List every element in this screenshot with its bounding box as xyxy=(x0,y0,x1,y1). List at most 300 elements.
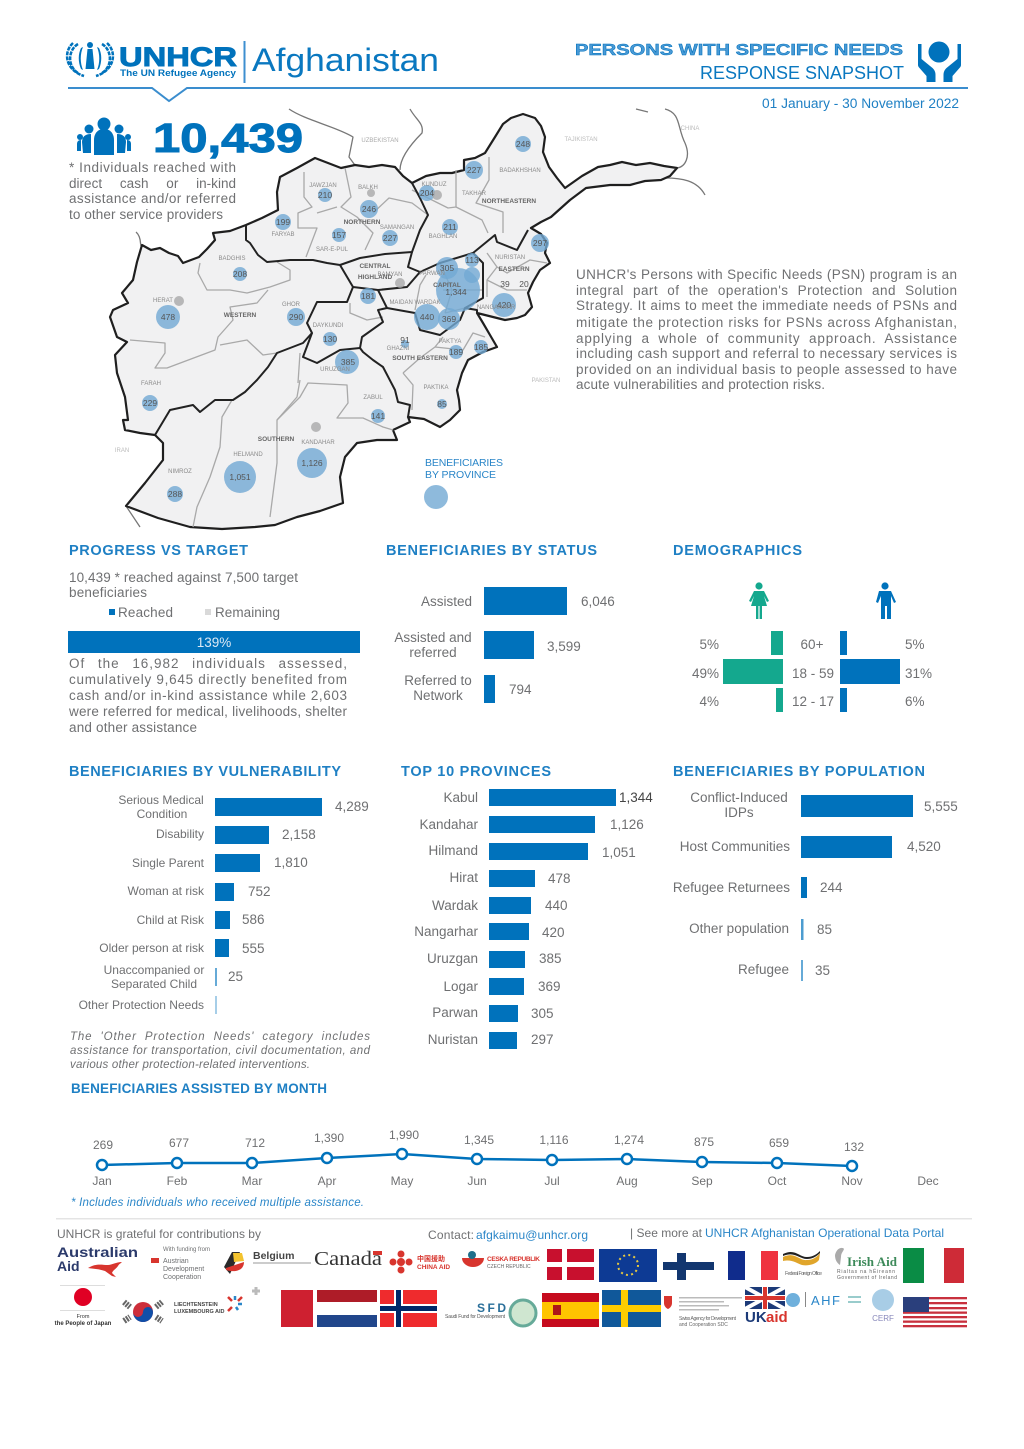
heading: BENEFICIARIES ASSISTED BY MONTH xyxy=(71,1081,327,1096)
legend: Reached xyxy=(118,605,173,620)
panel: beneficiaries by status xyxy=(386,543,615,703)
line chart: 132 xyxy=(844,1140,864,1154)
province values: 297 xyxy=(533,238,547,248)
bar chart: Single Parent xyxy=(132,856,205,870)
population pyramid: 6% xyxy=(905,694,925,709)
province and region labels: BALKH xyxy=(358,185,378,191)
province and region labels: TAKHAR xyxy=(462,191,487,197)
province and region labels: KANDAHAR xyxy=(301,440,335,446)
bar chart: 2,158 xyxy=(282,827,316,842)
flag: Finland xyxy=(663,1253,714,1280)
province values: 420 xyxy=(497,300,511,310)
target text: beneficiaries xyxy=(69,585,147,600)
big number: 10,439 xyxy=(153,115,303,161)
donor: Czech aid xyxy=(462,1251,540,1270)
progress note: Of the 16,982 individuals assessed, xyxy=(69,656,347,671)
country labels: PAKISTAN xyxy=(532,378,560,384)
line chart: Oct xyxy=(768,1174,787,1188)
bar chart: 586 xyxy=(242,912,265,927)
province values: 185 xyxy=(474,342,488,352)
donor: Canada: Canada xyxy=(314,1248,382,1270)
bar chart xyxy=(673,790,958,981)
line chart: Apr xyxy=(318,1174,336,1188)
bar chart: 85 xyxy=(817,922,832,937)
donor: AHF: AHF xyxy=(811,1293,842,1308)
population pyramid xyxy=(692,631,932,712)
logo wordmark: The UN Refugee Agency xyxy=(120,68,236,78)
progress note xyxy=(68,656,348,735)
donor: Saudi Fund for Development: SFD xyxy=(477,1301,506,1315)
province values: 39 xyxy=(500,279,510,289)
province and region labels: KUNDUZ xyxy=(422,182,447,188)
bar chart: 4,289 xyxy=(335,799,369,814)
donor: Austrian Development Cooperation: With funding from xyxy=(163,1247,210,1253)
panel: progress vs target xyxy=(68,543,360,735)
province and region labels: BAGHLAN xyxy=(429,234,457,240)
bar chart: Nangarhar xyxy=(414,924,478,939)
province and region labels: SAR-E-PUL xyxy=(316,247,349,253)
donor: Japan: the People of Japan xyxy=(55,1321,112,1327)
programme description: integral part of the operation's Protection and Solution xyxy=(576,283,957,298)
province and region labels: CAPITAL xyxy=(433,282,461,289)
donor: Czech aid: CZECH REPUBLIC xyxy=(487,1264,531,1270)
line chart: 659 xyxy=(769,1136,789,1150)
province and region labels: WESTERN xyxy=(224,312,257,319)
bar chart: referred xyxy=(409,645,457,660)
donor: Switzerland: Swiss Agency for Development xyxy=(679,1316,737,1322)
bar chart: 25 xyxy=(228,969,243,984)
donor: CERF: CERF xyxy=(872,1314,894,1323)
icon: male xyxy=(876,582,896,619)
province and region labels: EASTERN xyxy=(498,266,530,273)
icon: UNHCR emblem xyxy=(67,42,113,76)
logo wordmark: UNHCR xyxy=(119,42,237,72)
bar chart: Referred to xyxy=(404,673,472,688)
country labels: CHINA xyxy=(681,126,699,132)
map legend xyxy=(424,457,503,509)
line chart xyxy=(92,1128,939,1188)
province and region labels: MAIDAN WARDAK xyxy=(389,300,441,306)
province and region labels: PAKTIKA xyxy=(424,385,448,391)
heading: DEMOGRAPHICS xyxy=(673,543,802,559)
province and region labels: FARAH xyxy=(141,381,161,387)
heading: PROGRESS VS TARGET xyxy=(69,543,248,559)
bar chart: 1,126 xyxy=(610,817,644,832)
donor: Germany: Federal Foreign Office xyxy=(785,1271,822,1277)
bar chart: Logar xyxy=(443,979,479,994)
icon: hands protecting person xyxy=(918,42,961,82)
province and region labels: JAWZJAN xyxy=(309,183,337,189)
donor: Switzerland: and Cooperation SDC xyxy=(679,1322,728,1328)
bar chart: Nuristan xyxy=(428,1032,478,1047)
donor: UK aid: aid xyxy=(766,1309,788,1326)
legend: Remaining xyxy=(215,605,280,620)
province values: 204 xyxy=(420,188,434,198)
bar chart: 385 xyxy=(539,951,562,966)
progress note: and other assistance xyxy=(69,720,197,735)
bar chart: Assisted xyxy=(421,594,472,609)
line chart: Jun xyxy=(467,1174,487,1188)
line chart: 1,990 xyxy=(389,1128,419,1142)
province values: 246 xyxy=(362,204,376,214)
contact: afgkaimu@unhcr.org xyxy=(476,1228,588,1242)
donor: Switzerland xyxy=(664,1296,742,1328)
bar chart: 440 xyxy=(545,898,568,913)
italic note: The 'Other Protection Needs' category includes xyxy=(70,1031,370,1043)
heading: BENEFICIARIES BY VULNERABILITY xyxy=(69,764,341,780)
logo wordmark xyxy=(119,42,237,78)
province values: 157 xyxy=(332,230,346,240)
population pyramid: 49% xyxy=(692,666,719,681)
donor: Saudi Fund for Development: Saudi Fund for Development xyxy=(445,1314,506,1320)
bar chart: Hirat xyxy=(449,870,478,885)
bar chart: Older person at risk xyxy=(99,941,205,955)
flag: Republic of Korea xyxy=(124,1302,162,1322)
bar chart: 305 xyxy=(531,1006,554,1021)
line chart: Aug xyxy=(616,1174,638,1188)
donor: Austrian Development Cooperation: Development xyxy=(163,1266,204,1273)
legend xyxy=(109,605,280,620)
individuals note: * Individuals reached with xyxy=(69,160,236,175)
population pyramid: 18 - 59 xyxy=(792,666,834,681)
line chart: Jan xyxy=(92,1174,112,1188)
bar chart: 35 xyxy=(815,963,830,978)
province and region labels xyxy=(141,168,541,475)
population pyramid: 4% xyxy=(699,694,719,709)
province and region labels: HERAT xyxy=(153,298,173,304)
province and region labels: GHOR xyxy=(282,302,301,308)
flag: Netherlands xyxy=(317,1290,377,1327)
bar chart: Unaccompanied or xyxy=(104,963,204,977)
donor: China Aid xyxy=(390,1250,450,1274)
province values: 229 xyxy=(143,398,157,408)
bar chart: 478 xyxy=(548,871,571,886)
bar chart: Kandahar xyxy=(419,817,478,832)
programme description: including cash support and referral to necessary services is xyxy=(576,346,957,361)
province values: 290 xyxy=(289,312,303,322)
black regional boundaries xyxy=(155,183,528,435)
province and region labels: SAMANGAN xyxy=(380,225,414,231)
province values: 85 xyxy=(437,399,447,409)
donor: China Aid: CHINA AID xyxy=(417,1264,450,1271)
donor: Irish Aid xyxy=(835,1248,898,1281)
bar chart: 6,046 xyxy=(581,594,615,609)
bar chart: 244 xyxy=(820,880,843,895)
line chart: 1,116 xyxy=(539,1133,569,1147)
population pyramid: 31% xyxy=(905,666,932,681)
bar chart: Condition xyxy=(137,807,187,821)
province and region labels: HELMAND xyxy=(233,452,263,458)
flag: Spain xyxy=(542,1293,599,1327)
flag: Monaco xyxy=(281,1290,313,1327)
province values: 385 xyxy=(341,357,355,367)
italic note: assistance for transportation, civil documentation, and xyxy=(70,1045,371,1057)
flag: Italy xyxy=(903,1248,964,1283)
bar chart: 555 xyxy=(242,941,265,956)
bar chart: Wardak xyxy=(432,898,478,913)
flag: France xyxy=(728,1251,778,1280)
bar chart: 1,051 xyxy=(602,845,636,860)
italic note: various other protection-related interventions. xyxy=(70,1059,310,1071)
bar chart: Refugee Returnees xyxy=(673,880,790,895)
heading: BENEFICIARIES BY POPULATION xyxy=(673,764,925,780)
donor: Liechtenstein and Luxembourg xyxy=(174,1287,260,1315)
heading: TOP 10 PROVINCES xyxy=(401,764,551,780)
province values: 248 xyxy=(516,139,530,149)
line chart: Dec xyxy=(917,1174,939,1188)
bar chart: Disability xyxy=(156,827,204,841)
data portal link: UNHCR Afghanistan Operational Data Portal xyxy=(705,1226,944,1240)
donor: Czech aid: CESKA REPUBLIK xyxy=(487,1256,540,1263)
donor: Austrian Development Cooperation: Cooperation xyxy=(163,1274,201,1281)
bar chart: 794 xyxy=(509,682,532,697)
bar chart: 5,555 xyxy=(924,799,958,814)
population pyramid: 60+ xyxy=(801,637,824,652)
province and region labels: CENTRAL xyxy=(359,263,391,270)
line chart: May xyxy=(391,1174,413,1188)
donor: Irish Aid: Rialtas na hÉireann xyxy=(837,1268,895,1275)
country labels: TAJIKISTAN xyxy=(564,137,598,143)
individuals note: assistance and/or referred xyxy=(69,191,236,206)
headline figure xyxy=(69,115,303,222)
donor: AHF xyxy=(786,1292,861,1308)
donor: Belgium: Belgium xyxy=(253,1250,294,1262)
donor: Liechtenstein and Luxembourg: LUXEMBOURG AID xyxy=(174,1309,225,1315)
province values: 1,051 xyxy=(229,472,251,482)
line chart: 1,390 xyxy=(314,1131,344,1145)
bar chart: Child at Risk xyxy=(137,913,205,927)
bar chart: Hilmand xyxy=(428,843,478,858)
bar chart: 3,599 xyxy=(547,639,581,654)
bar chart: Network xyxy=(413,688,463,703)
line chart: 1,274 xyxy=(614,1133,644,1147)
donor: Australian Aid xyxy=(57,1244,138,1277)
province and region labels: NORTHEASTERN xyxy=(482,198,536,205)
donor: Japan: From xyxy=(77,1314,90,1320)
province values: 305 xyxy=(440,263,454,273)
bar chart: Woman at risk xyxy=(128,884,205,898)
line chart: 1,345 xyxy=(464,1133,494,1147)
bar chart xyxy=(79,793,369,1014)
donor: Belgium xyxy=(224,1250,311,1274)
province and region labels: URUZGAN xyxy=(320,367,350,373)
panel: beneficiaries by population xyxy=(673,764,958,981)
bar chart: 369 xyxy=(538,979,561,994)
country labels: UZBEKISTAN xyxy=(361,138,399,144)
line chart: Nov xyxy=(841,1174,863,1188)
donor: Austrian Development Cooperation xyxy=(151,1247,210,1281)
donor: Japan xyxy=(55,1285,112,1327)
bar chart: Uruzgan xyxy=(427,951,478,966)
panel: beneficiaries by vulnerability xyxy=(69,764,371,1071)
province values: 478 xyxy=(161,312,175,322)
programme description: provided on an individual basis to people assessed to have xyxy=(576,362,957,377)
bar chart: Other Protection Needs xyxy=(79,998,204,1012)
province values: 141 xyxy=(371,411,385,421)
population pyramid: 5% xyxy=(905,637,925,652)
province and region labels: PARWAN xyxy=(419,271,445,277)
province values: 113 xyxy=(465,255,479,265)
province and region labels: FARYAB xyxy=(271,232,295,238)
province and region labels: ZABUL xyxy=(363,395,383,401)
line chart: 677 xyxy=(169,1136,189,1150)
province values: 91 xyxy=(400,335,410,345)
icon: group of people xyxy=(77,118,131,155)
province and region labels: HIGHLAND xyxy=(358,274,392,281)
progress bar: 139% xyxy=(197,635,231,650)
heading: BENEFICIARIES BY STATUS xyxy=(386,543,597,559)
footnote: * Includes individuals who received multiple assistance. xyxy=(71,1197,364,1209)
donor: Irish Aid: Government of Ireland xyxy=(837,1275,897,1281)
line chart: Mar xyxy=(242,1174,262,1188)
progress note: were referred for medical, livelihoods, shelter xyxy=(68,704,348,719)
donor: CERF xyxy=(872,1289,894,1323)
provinces and country fill xyxy=(110,114,677,529)
individuals note: direct cash or in-kind xyxy=(69,176,236,191)
bar chart: Assisted and xyxy=(394,630,472,645)
province values: 227 xyxy=(383,233,397,243)
province values: 211 xyxy=(443,222,457,232)
donor: Germany xyxy=(783,1251,822,1277)
province values: 130 xyxy=(323,334,337,344)
bar chart: 4,520 xyxy=(907,839,941,854)
footer xyxy=(55,1218,972,1328)
bar chart: IDPs xyxy=(724,805,754,820)
contact: Contact: xyxy=(428,1228,474,1242)
line chart: 712 xyxy=(245,1136,265,1150)
programme description: UNHCR's Persons with Specific Needs (PSN) program is an xyxy=(576,267,957,282)
province and region labels: PAKTYA xyxy=(439,339,461,345)
province and region labels: SOUTH EASTERN xyxy=(392,355,448,362)
province values: 208 xyxy=(233,269,247,279)
country labels xyxy=(115,126,699,454)
bar chart: 1,810 xyxy=(274,855,308,870)
programme description: acute vulnerabilities and protection risks. xyxy=(576,377,825,392)
line chart: 875 xyxy=(694,1135,714,1149)
province values xyxy=(143,139,547,499)
province values: 227 xyxy=(467,165,481,175)
thanks line: UNHCR is grateful for contributions by xyxy=(57,1227,261,1241)
bar chart: 752 xyxy=(248,884,271,899)
panel: demographics xyxy=(673,543,932,712)
province values: 189 xyxy=(449,347,463,357)
province and region labels: BADAKHSHAN xyxy=(499,168,541,174)
bar chart: Other population xyxy=(689,921,789,936)
bar chart xyxy=(394,587,615,703)
flag: European Union xyxy=(599,1249,657,1282)
donor: Austrian Development Cooperation: Austrian xyxy=(163,1258,189,1265)
bar chart: Host Communities xyxy=(680,839,790,854)
line chart: Sep xyxy=(691,1174,713,1188)
donor: Saudi Fund for Development xyxy=(445,1300,536,1326)
title: Afghanistan: Afghanistan xyxy=(252,42,439,78)
programme description: applying a whole of community approach. Assistance xyxy=(576,331,957,346)
title: persons with specific needs: PERSONS WITH SPECIFIC NEEDS xyxy=(575,42,903,59)
donor: UK aid: UK xyxy=(745,1309,767,1326)
progress bar xyxy=(68,631,360,653)
bar chart: Separated Child xyxy=(111,977,197,991)
country labels: IRAN xyxy=(115,448,129,454)
panel: beneficiaries assisted by month xyxy=(71,1081,939,1209)
target text xyxy=(69,570,298,600)
flag: Norway xyxy=(380,1290,437,1327)
subtitle: response snapshot: RESPONSE SNAPSHOT xyxy=(700,63,904,83)
province and region labels: BAMYAN xyxy=(378,272,402,278)
data portal link: | See more at xyxy=(630,1226,703,1240)
donor: Irish Aid: Irish Aid xyxy=(847,1254,898,1269)
province values: 181 xyxy=(361,291,375,301)
progress note: cumulatively 9,645 directly benefited from xyxy=(69,672,347,687)
individuals note xyxy=(69,160,236,222)
line chart: Jul xyxy=(544,1174,560,1188)
individuals note: to other service providers xyxy=(69,207,223,222)
map legend: BY PROVINCE xyxy=(425,469,496,481)
province bubbles xyxy=(142,136,549,502)
population pyramid: 5% xyxy=(699,637,719,652)
header xyxy=(67,41,968,111)
province values: 1,344 xyxy=(445,287,467,297)
province and region labels: DAYKUNDI xyxy=(313,323,344,329)
bar chart xyxy=(414,789,653,1049)
donor: UK aid xyxy=(745,1287,788,1326)
donor: Australian Aid: Aid xyxy=(57,1258,80,1274)
bar chart: Conflict-Induced xyxy=(690,790,788,805)
province values: 369 xyxy=(442,314,456,324)
grey province boundaries xyxy=(130,157,547,527)
donor: Liechtenstein and Luxembourg: LIECHTENSTEIN xyxy=(174,1302,218,1308)
donor: China Aid: 中国援助 xyxy=(417,1254,445,1263)
programme description xyxy=(576,267,957,392)
province and region labels: GHAZNI xyxy=(387,346,410,352)
province values: 440 xyxy=(420,312,434,322)
target text: 10,439 * reached against 7,500 target xyxy=(69,570,298,585)
programme description: Strategy. It aims to meet the immediate needs of PSNs and xyxy=(576,298,957,313)
map of Afghanistan xyxy=(110,109,705,529)
neighbouring borders xyxy=(126,109,705,527)
province values: 1,126 xyxy=(301,458,323,468)
province and region labels: NIMROZ xyxy=(168,469,192,475)
province values: 199 xyxy=(276,217,290,227)
line chart: 269 xyxy=(93,1138,113,1152)
date range: 01 January - 30 November 2022 xyxy=(762,96,959,111)
flag: Denmark xyxy=(547,1249,594,1280)
bar chart: Serious Medical xyxy=(118,793,204,807)
flag: Sweden xyxy=(602,1290,661,1327)
italic note xyxy=(70,1031,371,1071)
population pyramid: 12 - 17 xyxy=(792,694,834,709)
province and region labels: SOUTHERN xyxy=(258,436,295,443)
province and region labels: NURISTAN xyxy=(495,255,525,261)
progress note: cash and/or in-kind assistance while 2,603 xyxy=(69,688,347,703)
bar chart: 1,344 xyxy=(619,790,653,805)
flag: USA xyxy=(903,1297,967,1327)
province and region labels: NORTHERN xyxy=(344,219,381,226)
icon: female xyxy=(749,582,769,619)
programme description: mitigate the protection risks for PSNs across Afghanistan, xyxy=(576,315,957,330)
panel: top 10 provinces xyxy=(401,764,653,1049)
map legend: BENEFICIARIES xyxy=(425,457,503,469)
bar chart: Refugee xyxy=(738,962,789,977)
header rule with chevron xyxy=(68,88,968,101)
line chart: Feb xyxy=(167,1174,188,1188)
province values: 210 xyxy=(318,190,332,200)
bar chart: 297 xyxy=(531,1032,554,1047)
donor: Australian Aid: Australian xyxy=(57,1244,138,1260)
province values: 20 xyxy=(519,279,529,289)
province and region labels: NANGARHAR xyxy=(477,305,516,311)
bar chart: 420 xyxy=(542,925,565,940)
province and region labels: BADGHIS xyxy=(218,256,246,262)
